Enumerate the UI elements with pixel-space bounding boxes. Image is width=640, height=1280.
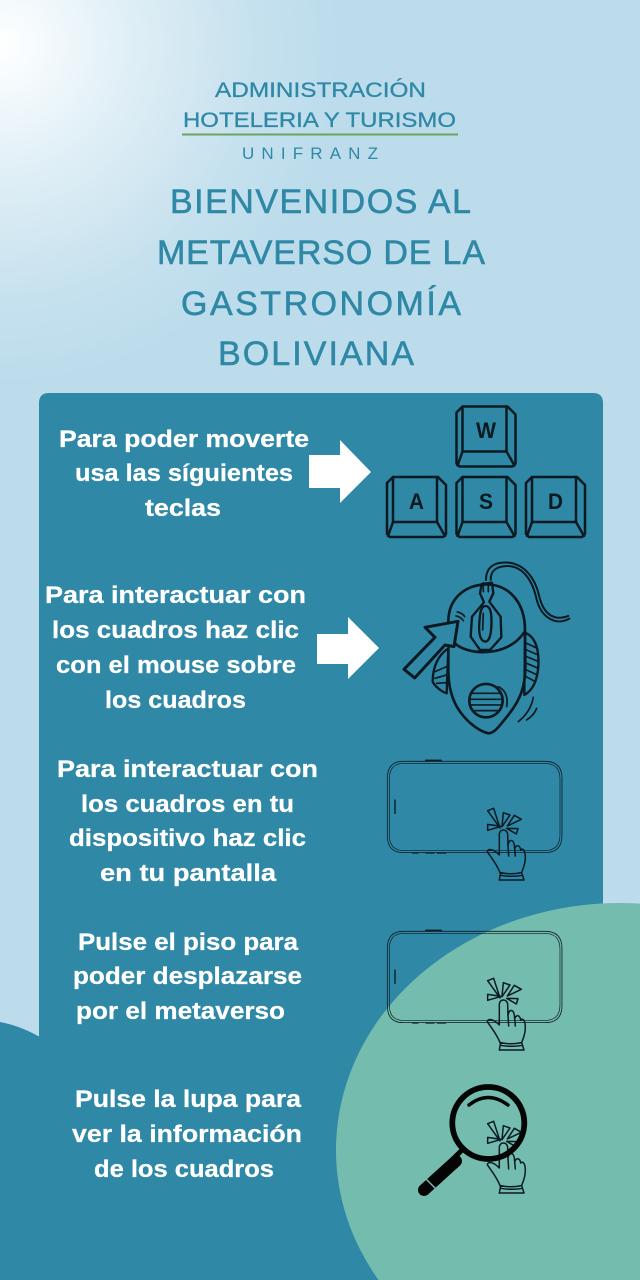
title [157, 183, 485, 373]
arrow: keyboard [309, 440, 371, 503]
icon: WASD keys: W [476, 418, 496, 443]
icon: WASD keys: A [409, 489, 424, 514]
green rule [182, 134, 458, 136]
title: METAVERSO DE LA [157, 234, 485, 272]
text block: mouse instruction: Para interactuar con [45, 582, 306, 609]
text block: magnifier instruction: ver la información [72, 1121, 302, 1148]
text block: keyboard instruction: Para poder moverte [59, 426, 309, 453]
text block: device instruction [57, 756, 318, 887]
icon: WASD keys [387, 406, 585, 537]
title: GASTRONOMÍA [181, 285, 461, 323]
text block: magnifier instruction [72, 1086, 302, 1183]
text block: mouse instruction [45, 582, 306, 714]
text block: floor instruction [73, 929, 302, 1025]
icon: mouse with cursor [404, 563, 569, 733]
text block: mouse instruction: con el mouse sobre [56, 652, 296, 679]
text block: magnifier instruction: de los cuadros [94, 1156, 274, 1183]
text block: floor instruction: por el metaverso [76, 998, 285, 1025]
icon: WASD keys: S [479, 489, 493, 514]
text block: device instruction: dispositivo haz clic [69, 825, 306, 852]
text block: device instruction: los cuadros en tu [81, 791, 294, 818]
icon: magnifier with tap [424, 1087, 525, 1193]
text block: device instruction: Para interactuar con [57, 756, 318, 783]
text block: floor instruction: poder desplazarse [73, 963, 302, 990]
text block: keyboard instruction: teclas [145, 495, 221, 522]
heading: university: UNIFRANZ [242, 144, 378, 163]
green circle [336, 903, 640, 1280]
text block: keyboard instruction [59, 426, 309, 522]
text block: magnifier instruction: Pulse la lupa para [75, 1086, 302, 1113]
text block: mouse instruction: los cuadros haz clic [52, 617, 299, 644]
panel: instructions [39, 393, 603, 1280]
icon: phone with tap on floor [387, 930, 562, 1050]
heading: programme: ADMINISTRACIÓN [215, 79, 426, 102]
text block: device instruction: en tu pantalla [100, 860, 277, 887]
heading: programme line two: HOTELERIA Y TURISMO [183, 109, 456, 132]
title: BOLIVIANA [218, 335, 414, 373]
title: BIENVENIDOS AL [170, 183, 471, 221]
bottom-left hill [0, 1022, 120, 1280]
icon: WASD keys: D [548, 489, 563, 514]
text block: keyboard instruction: usa las síguientes [75, 460, 293, 487]
icon: phone with tap [387, 760, 562, 880]
arrow: mouse [317, 617, 379, 679]
text block: floor instruction: Pulse el piso para [78, 929, 299, 956]
header [182, 79, 458, 163]
text block: mouse instruction: los cuadros [105, 687, 246, 714]
